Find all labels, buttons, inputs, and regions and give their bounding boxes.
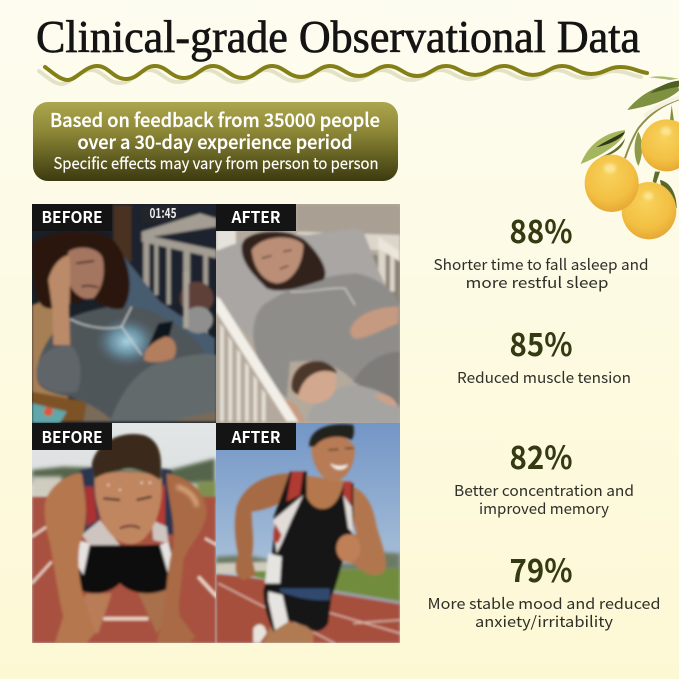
right arm: [350, 486, 388, 576]
stat: 82 percent concentration: [454, 433, 634, 519]
stat: 85 percent muscle tension: [457, 320, 631, 388]
callout: survey basis: Based on feedback from 35000 people: [50, 106, 380, 133]
callout: survey basis: over a 30-day experience period: [78, 128, 352, 155]
wavy underline: [39, 66, 647, 84]
phone and hand: [147, 321, 173, 350]
callout: survey basis: Specific effects may vary from person to person: [54, 150, 378, 174]
stat: 88 percent sleep: [434, 207, 648, 293]
label: after, top: [216, 204, 296, 231]
stat: 88 percent sleep: 88%: [510, 207, 572, 253]
clock time: 01:45: [150, 203, 176, 223]
photo: after, sleeping mother and baby: [216, 204, 400, 423]
shorts: [263, 590, 332, 632]
icon: lemon branch: [581, 76, 679, 239]
photo: after, smiling runner: [216, 423, 400, 643]
stat: 82 percent concentration: 82%: [510, 433, 572, 479]
hand at temple: [48, 255, 70, 345]
singlet: [263, 472, 353, 600]
label: before, top: BEFORE: [42, 204, 102, 228]
baby: [307, 385, 400, 423]
face: [67, 248, 104, 299]
label: before, bottom: BEFORE: [42, 424, 102, 448]
label: after, bottom: [216, 423, 296, 450]
stat: 79 percent mood: More stable mood and reduced: [428, 593, 660, 614]
legs: [263, 620, 313, 643]
stat: 82 percent concentration: improved memory: [479, 498, 609, 519]
label: before, top: [32, 204, 112, 231]
fist: [336, 534, 360, 562]
callout: survey basis: [33, 102, 398, 181]
stat: 82 percent concentration: Better concentration and: [454, 480, 634, 501]
torso skin: [304, 473, 347, 512]
hair: [242, 232, 325, 291]
sleeve: [37, 345, 81, 393]
hair: [32, 232, 130, 309]
shorts and singlet: [78, 543, 177, 593]
stat: 79 percent mood: [428, 546, 660, 632]
hand: [350, 307, 398, 338]
photo: before, exhausted runner: [32, 423, 217, 643]
icon: crib: [142, 213, 217, 335]
stat: 88 percent sleep: more restful sleep: [466, 272, 608, 293]
legs: [83, 590, 112, 634]
stat: 85 percent muscle tension: 85%: [510, 320, 572, 366]
right arm: [157, 473, 207, 643]
photo: before, sleepless mother: [32, 203, 217, 423]
label: before, bottom: [32, 423, 112, 450]
stat: 79 percent mood: anxiety/irritability: [475, 611, 613, 632]
crib rail: [216, 297, 298, 422]
stat: 79 percent mood: 79%: [510, 546, 572, 592]
pillows: [216, 229, 390, 338]
head: [311, 434, 355, 482]
head: [95, 472, 162, 544]
stat: 85 percent muscle tension: Reduced muscle tension: [457, 367, 631, 388]
left arm: [235, 473, 292, 580]
label: after, bottom: AFTER: [231, 424, 281, 448]
label: after, top: AFTER: [231, 204, 281, 228]
title: Clinical-grade Observational Data: [36, 12, 640, 62]
body: [253, 273, 400, 408]
face: [252, 237, 303, 283]
stat: 88 percent sleep: Shorter time to fall asleep and: [434, 254, 648, 275]
clock: [141, 204, 179, 224]
left arm: [45, 473, 95, 643]
